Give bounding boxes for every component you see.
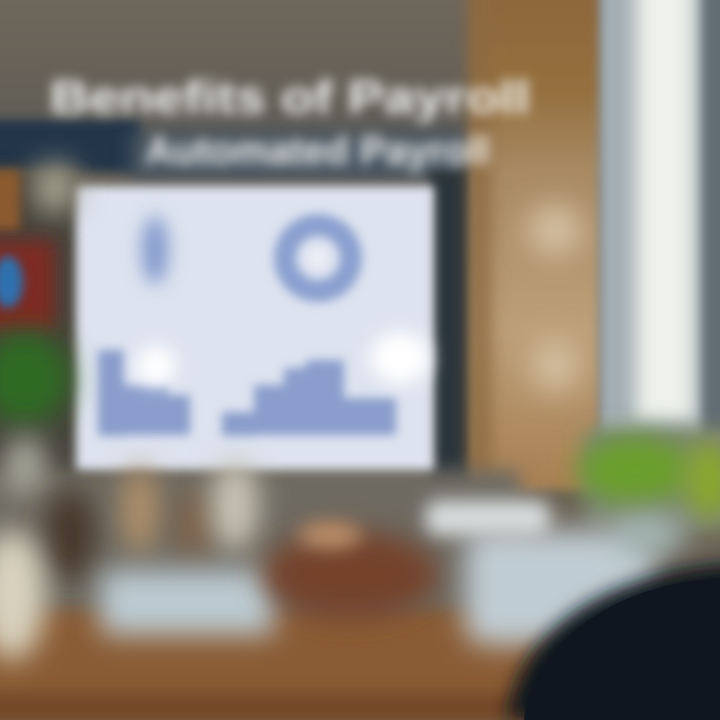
left plant and red blue object [0,162,77,495]
window [585,0,720,530]
desk objects [0,459,275,660]
wooden pillar [470,0,600,490]
chart highlights [136,332,430,386]
title line 1: Benefits of Payroll [50,71,530,123]
title line 2: Automated Payroll [145,129,490,173]
background wall [0,0,490,500]
right plant [577,436,720,555]
dark shoulder [508,562,720,720]
icon: circular badge [285,225,351,291]
shirt sleeve [425,500,655,645]
icon: location pin [142,216,168,284]
monitor [76,186,434,470]
title [50,71,530,173]
hand [262,521,438,619]
bar chart [98,350,396,436]
desk [0,470,560,720]
